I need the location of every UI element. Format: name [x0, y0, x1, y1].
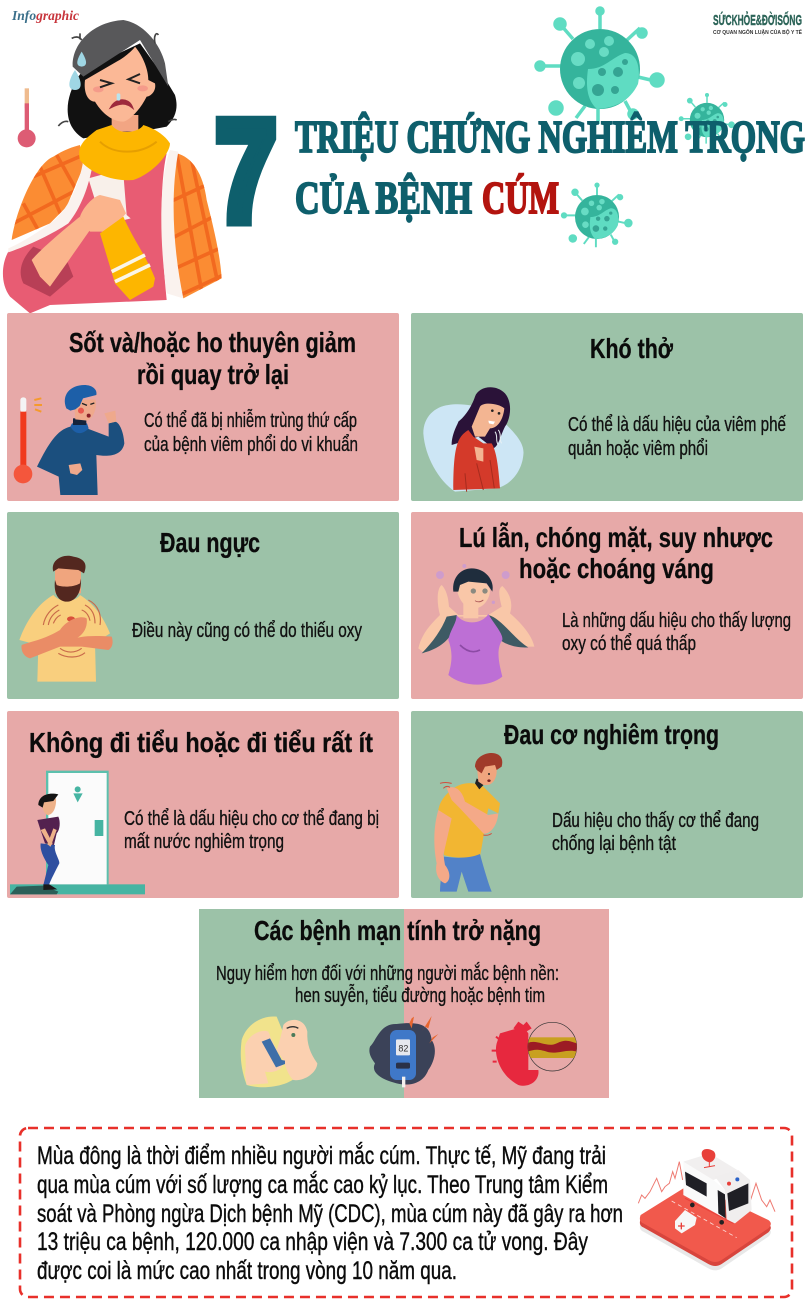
heading: rồi quay trở lại [137, 359, 289, 390]
panel: đau ngực [7, 512, 399, 699]
icon: man with chest pain [19, 556, 113, 682]
callout text: Mùa đông là thời điểm nhiều người mắc cúm. Thực tế, Mỹ đang trải [37, 1141, 606, 1170]
heading [459, 522, 773, 584]
callout text: 13 triệu ca bệnh, 120.000 ca nhập viện và 7.300 ca tử vong. Đây [37, 1228, 588, 1256]
illustration: sick woman with scarf and thermometer [3, 20, 223, 313]
text [124, 808, 379, 853]
text [562, 610, 791, 655]
text: chống lại bệnh tật [552, 833, 676, 855]
text: oxy có thể quá thấp [562, 633, 696, 655]
icon: toilet door with man [10, 771, 145, 894]
text: Có thể là dấu hiệu cho cơ thể đang bị [124, 808, 379, 830]
panel: không đi tiểu [7, 711, 399, 898]
brand label: Infographic: Infographic [11, 8, 79, 23]
title line 2: CỦA BỆNH [295, 172, 472, 223]
text: hen suyễn, tiểu đường hoặc bệnh tim [295, 984, 545, 1007]
icon group: inhaler, glucose meter, heart [241, 1016, 577, 1087]
text [568, 414, 786, 460]
text: quản hoặc viêm phổi [568, 438, 708, 460]
heading: Sốt và/hoặc ho thuyên giảm [69, 327, 356, 358]
heading: Đau cơ nghiêm trọng [504, 719, 719, 750]
callout text: được coi là mức cao nhất trong vòng 10 năm qua. [37, 1257, 457, 1285]
panel: khó thở [411, 313, 803, 501]
title line 2: CÚM [482, 172, 559, 223]
text: Điều này cũng có thể do thiếu oxy [132, 620, 362, 642]
logo: Sức khỏe & Đời sống [713, 11, 803, 36]
heading: Khó thở [590, 333, 673, 364]
text [216, 962, 559, 1007]
heading [69, 327, 356, 390]
callout text: soát và Phòng ngừa Dịch bệnh Mỹ (CDC), mùa cúm này đã gây ra hơn [37, 1200, 623, 1228]
panel: đau cơ [411, 711, 803, 898]
panel: lú lẫn [411, 512, 803, 699]
icon: woman short of breath [423, 387, 524, 492]
callout text [37, 1141, 623, 1285]
panel: bệnh mạn tính [199, 909, 609, 1098]
text: của bệnh viêm phổi do vi khuẩn [144, 434, 358, 456]
title number 7: 7 [216, 92, 276, 251]
text: mất nước nghiêm trọng [124, 831, 284, 853]
virus beside title [562, 183, 632, 247]
callout: thông tin mùa cúm [20, 1128, 792, 1297]
virus small behind title [679, 94, 734, 144]
icon: ambulance on red platform [638, 1149, 775, 1270]
text: Có thể đã bị nhiễm trùng thứ cấp [144, 409, 357, 432]
icon: thermometer and coughing man [14, 385, 124, 495]
heading: Đau ngực [160, 527, 260, 558]
callout text: qua mùa cúm với số lượng ca mắc cao kỷ lục. Theo Trung tâm Kiểm [37, 1170, 608, 1199]
heading: Các bệnh mạn tính trở nặng [254, 915, 541, 946]
icon: man with shoulder pain [434, 753, 502, 892]
icon: dizzy woman [418, 564, 534, 685]
text [144, 409, 358, 456]
panel: sốt và ho [7, 313, 399, 501]
heading: hoặc choáng váng [519, 553, 714, 584]
logo: Sức khỏe & Đời sống: CƠ QUAN NGÔN LUẬN CỦA BỘ Y TẾ [713, 28, 803, 36]
text: Nguy hiểm hơn đối với những người mắc bệnh nền: [216, 962, 559, 985]
heading: Không đi tiểu hoặc đi tiểu rất ít [29, 727, 373, 758]
text [552, 810, 759, 855]
icon group: inhaler, glucose meter, heart: 82 [398, 1043, 408, 1053]
virus large [536, 8, 663, 124]
